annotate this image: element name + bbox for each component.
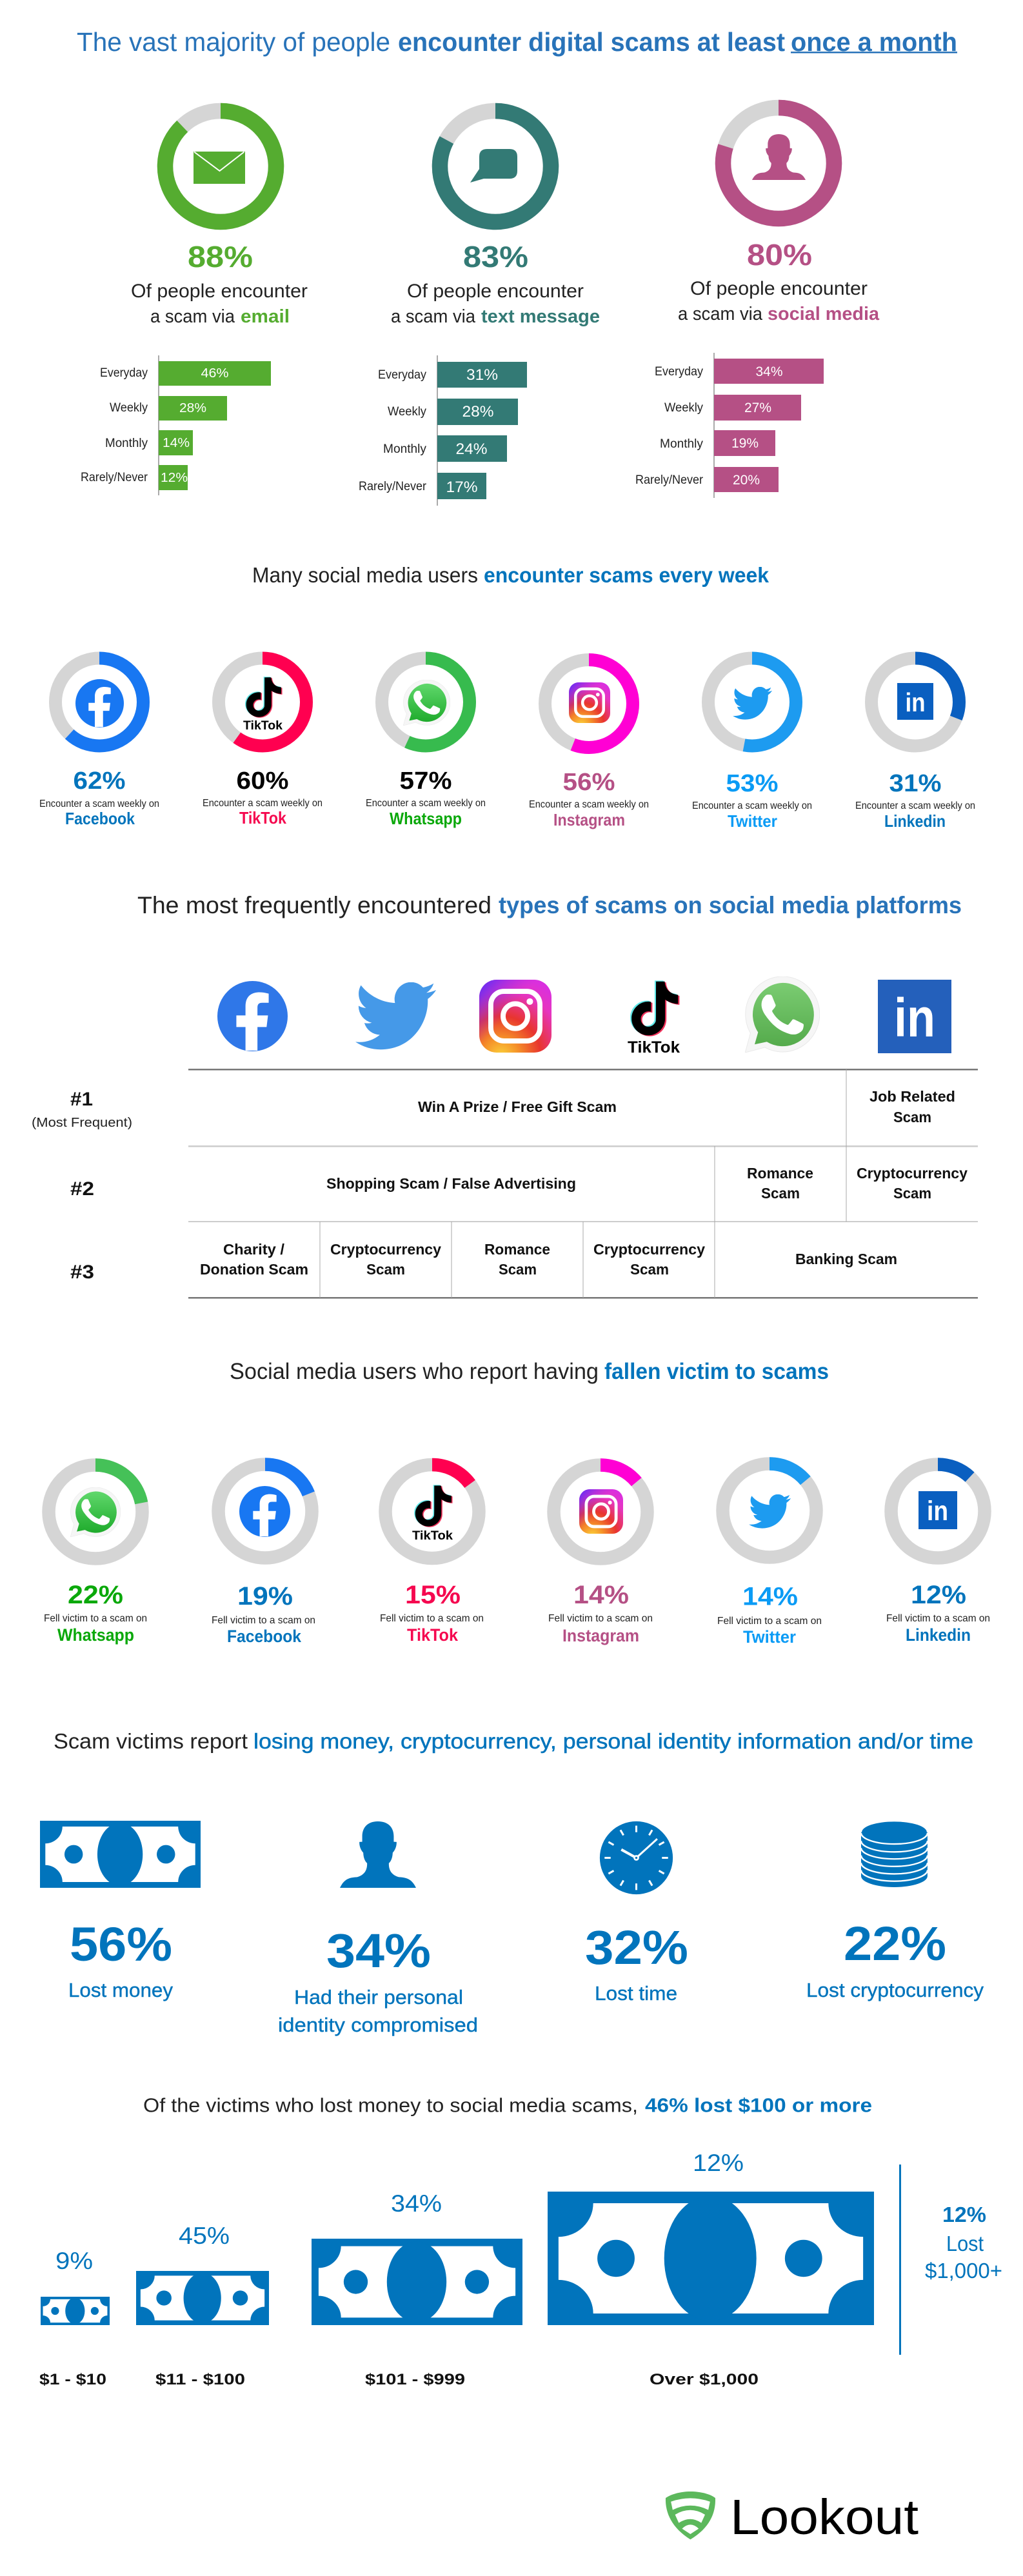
stat: Facebook 62%: [39, 768, 159, 828]
rank labels: #1: [70, 1089, 93, 1110]
stat: Instagram 56%: Instagram: [553, 810, 625, 829]
stat: Instagram 14%: Instagram: [562, 1626, 639, 1645]
row 2 cells: Romance: [747, 1165, 813, 1182]
bar: $101 - $999: $101 - $999: [365, 2371, 465, 2388]
panel: scam types table: [32, 976, 978, 1299]
row 3 cells: [200, 1241, 897, 1278]
stat: TikTok 15%: TikTok: [407, 1625, 459, 1645]
stat: Linkedin 12%: 12%: [911, 1581, 966, 1609]
stat: 83% text message: [391, 240, 600, 327]
stat: 22% lost cryptocurrency: 22%: [844, 1917, 946, 1970]
heading: money lost: [143, 2094, 872, 2117]
stat: Linkedin 12%: [886, 1581, 990, 1645]
stat: TikTok 60%: 60%: [236, 768, 289, 795]
bar: $11 - $100: $11 - $100: [155, 2371, 245, 2388]
bar chart: text frequency: [359, 355, 527, 506]
icon: person: [752, 134, 806, 180]
stat: TikTok 15%: 15%: [405, 1581, 461, 1609]
stat: 88% email: 88%: [188, 240, 253, 273]
stat: 88% email: Of people encounter: [131, 281, 308, 302]
donut chart: Instagram 14%: [553, 1465, 648, 1558]
panel: lost cryptocurrency: [806, 1821, 984, 2001]
stat: 34% identity: Had their personal: [294, 1986, 463, 2008]
panel: weekly Instagram: [529, 660, 649, 829]
donut chart: Facebook 19%: [218, 1464, 312, 1558]
stat: Whatsapp 22%: [44, 1581, 147, 1645]
title: encounter digital scams at least: [398, 27, 785, 57]
bar: $1 - $10: 9%: [55, 2248, 93, 2274]
bar chart: text frequency: Monthly: [383, 442, 427, 456]
bar chart: text frequency: 17%: [446, 479, 477, 496]
row 2 cells: Scam: [761, 1185, 800, 1202]
bar chart: text frequency: 28%: [462, 403, 494, 421]
stat: 80% social media: a scam via: [678, 304, 763, 324]
bar chart: text frequency: 31%: [466, 366, 498, 384]
panel: victims TikTok: [380, 1465, 484, 1645]
panel: victims Instagram: [548, 1465, 653, 1645]
bar chart: social frequency: Weekly: [664, 401, 703, 415]
bar chart: text frequency: Rarely/Never: [359, 480, 427, 493]
panel: weekly Twitter: [692, 658, 812, 831]
heading: weekly scams: [252, 563, 770, 587]
bar chart: social frequency: [635, 353, 824, 498]
icon: TikTok: [412, 1485, 453, 1543]
panel: victims Linkedin: [886, 1464, 990, 1645]
icon: envelope: [194, 152, 245, 184]
icon: Linkedin: [897, 683, 933, 720]
donut chart: social 80%: [723, 108, 834, 219]
icon: Instagram: [579, 1489, 623, 1534]
row 3 cells: Cryptocurrency: [593, 1241, 705, 1258]
icon: coin stack: [861, 1821, 928, 1887]
bar chart: email frequency: 46%: [201, 366, 229, 381]
bar chart: social frequency: 27%: [744, 401, 771, 415]
bar: over $1,000: 12%: [693, 2150, 744, 2176]
panel: weekly Linkedin: [855, 658, 975, 831]
bar: $1 - $10: [39, 2248, 110, 2388]
rank labels: (Most Frequent): [32, 1116, 132, 1130]
stat: TikTok 60%: TikTok: [239, 808, 286, 827]
bar chart: social frequency: 19%: [731, 436, 759, 451]
stat: 34% identity: 34%: [326, 1924, 431, 1977]
stat: Linkedin 31%: [855, 770, 975, 831]
icon: TikTok: TikTok: [412, 1529, 453, 1543]
stat: 83% text message: 83%: [463, 240, 528, 273]
stat: Facebook 19%: [212, 1582, 315, 1646]
stat: 56% lost money: Lost money: [68, 1979, 173, 2001]
stat: Whatsapp 57%: Encounter a scam weekly on: [366, 798, 486, 809]
bar: $1 - $10: $1 - $10: [39, 2371, 106, 2388]
bar chart: email frequency: [81, 355, 271, 495]
stat: Whatsapp 22%: Fell victim to a scam on: [44, 1613, 147, 1624]
icon: Instagram: [569, 682, 610, 723]
stat: Twitter 53%: Encounter a scam weekly on: [692, 800, 812, 811]
callout: 12% lost $1,000+: 12%: [942, 2203, 986, 2226]
stat: Linkedin 31%: Linkedin: [884, 811, 946, 831]
stat: 22% lost cryptocurrency: [806, 1917, 984, 2001]
icon: Twitter: [733, 687, 772, 720]
table grid: [188, 1069, 978, 1299]
donut chart: TikTok 15%: [386, 1465, 479, 1558]
heading: fallen victim: [230, 1359, 829, 1384]
icon: Twitter: [749, 1494, 791, 1529]
stat: 32% lost time: Lost time: [595, 1982, 677, 2005]
rank labels: #3: [70, 1262, 94, 1283]
donut chart: Twitter 53%: [708, 658, 796, 746]
panel: weekly Whatsapp: [366, 658, 486, 828]
row 1 cells: Win A Prize / Free Gift Scam: [418, 1098, 617, 1115]
row 3 cells: Cryptocurrency: [330, 1241, 441, 1258]
bar chart: email frequency: Rarely/Never: [81, 471, 148, 484]
panel: victims Facebook: [212, 1464, 315, 1646]
rank labels: [32, 1089, 132, 1283]
stat: Whatsapp 22%: 22%: [68, 1581, 123, 1609]
donut chart: TikTok 60%: [219, 658, 306, 746]
stat: 22% lost cryptocurrency: Lost cryptocurrency: [806, 1979, 984, 2001]
heading: fallen victim: Social media users who report having: [230, 1359, 599, 1384]
heading: money lost: 46% lost $100 or more: [645, 2094, 872, 2117]
donut chart: Instagram 56%: [545, 660, 633, 748]
stat: Whatsapp 57%: [366, 768, 486, 828]
donut chart: Linkedin 31%: [871, 658, 959, 746]
stat: Instagram 14%: [548, 1581, 653, 1645]
bar chart: social frequency: Monthly: [660, 437, 704, 451]
row 3 cells: Scam: [499, 1261, 537, 1278]
stat: 80% social media: [678, 238, 880, 324]
bar chart: social frequency: 20%: [733, 473, 760, 488]
logo: Lookout: [666, 2490, 919, 2545]
icon row: platforms: [217, 976, 951, 1056]
stat: 80% social media: 80%: [747, 238, 812, 272]
icon: Facebook: [75, 679, 124, 728]
rank labels: #2: [70, 1178, 94, 1200]
stat: Whatsapp 57%: 57%: [400, 768, 452, 795]
stat: Linkedin 31%: 31%: [889, 770, 942, 797]
stat: Whatsapp 57%: Whatsapp: [390, 809, 462, 828]
donut chart: Whatsapp 22%: [49, 1465, 142, 1558]
stat: Facebook 62%: 62%: [74, 768, 125, 795]
title: once a month: [791, 27, 957, 57]
stat: Twitter 14%: 14%: [742, 1583, 798, 1611]
heading: types of scams: types of scams on social media platforms: [499, 892, 962, 918]
panel: lost time: [585, 1821, 688, 2005]
stat: 88% email: a scam via: [150, 306, 235, 327]
icon row: platforms: in: [894, 987, 935, 1048]
stat: 34% identity: [278, 1924, 478, 2036]
callout: 12% lost $1,000+: $1,000+: [925, 2259, 1002, 2283]
stat: Instagram 14%: 14%: [573, 1581, 629, 1609]
icon row: platforms: TikTok: [628, 1038, 680, 1056]
donut chart: email 88%: [165, 111, 276, 222]
bar chart: email frequency: 28%: [179, 401, 206, 415]
panel: text message scams: [359, 111, 600, 506]
row 2 cells: [326, 1165, 968, 1202]
stat: 56% lost money: 56%: [70, 1917, 172, 1971]
row 3 cells: Charity /: [223, 1241, 285, 1258]
stat: 32% lost time: [585, 1921, 688, 2005]
heading: money lost: Of the victims who lost money to social media scams,: [143, 2094, 638, 2117]
bar: $11 - $100: [136, 2223, 269, 2388]
title: [77, 27, 957, 57]
panel: weekly TikTok: [203, 658, 323, 827]
stat: Linkedin 31%: Encounter a scam weekly on: [855, 800, 975, 811]
row 2 cells: Scam: [893, 1185, 931, 1202]
bar: over $1,000: Over $1,000: [650, 2371, 759, 2388]
wordmark: Lookout: [730, 2490, 919, 2545]
heading: weekly scams: encounter scams every week: [484, 563, 770, 587]
heading: what victims lose: losing money, cryptocurrency, personal identity information and/or time: [253, 1729, 973, 1753]
icon: shield: [666, 2492, 715, 2539]
heading: types of scams: The most frequently encountered: [137, 892, 492, 918]
stat: Whatsapp 22%: Whatsapp: [57, 1625, 134, 1645]
row 3 cells: Scam: [630, 1261, 669, 1278]
stat: 88% email: email: [241, 306, 290, 327]
panel: lost money: [40, 1821, 201, 2001]
panel: victims Twitter: [717, 1464, 822, 1647]
bar chart: social frequency: Everyday: [655, 365, 703, 379]
heading: what victims lose: Scam victims report: [54, 1729, 248, 1753]
donut chart: Facebook 62%: [55, 658, 143, 746]
stat: 34% identity: identity compromised: [278, 2014, 478, 2036]
stat: Twitter 53%: 53%: [726, 770, 778, 797]
stat: 80% social media: social media: [768, 304, 880, 324]
bar chart: text frequency: Everyday: [378, 368, 426, 382]
panel: victims Whatsapp: [44, 1465, 147, 1645]
bar: $101 - $999: [312, 2190, 522, 2388]
bar chart: email frequency: Weekly: [110, 401, 148, 415]
stat: 83% text message: text message: [481, 306, 600, 327]
stat: Instagram 56%: [529, 769, 649, 829]
heading: fallen victim: fallen victim to scams: [604, 1359, 829, 1384]
stat: Facebook 19%: 19%: [237, 1582, 293, 1610]
row 1 cells: [418, 1088, 955, 1125]
row 3 cells: Romance: [484, 1241, 550, 1258]
row 2 cells: Shopping Scam / False Advertising: [326, 1175, 576, 1192]
stat: TikTok 15%: [380, 1581, 484, 1645]
icon: person: [340, 1821, 416, 1888]
icon: TikTok: [243, 677, 283, 733]
icon: Linkedin: [919, 1491, 957, 1529]
panel: social media scams: [635, 108, 880, 498]
bar chart: text frequency: 24%: [455, 441, 488, 458]
stat: 80% social media: Of people encounter: [690, 278, 868, 299]
donut chart: Twitter 14%: [722, 1464, 817, 1557]
bar: over $1,000: [548, 2150, 874, 2388]
heading: types of scams: [137, 892, 962, 918]
bar chart: social frequency: 34%: [756, 364, 783, 379]
row 3 cells: Banking Scam: [795, 1251, 897, 1267]
stat: 83% text message: a scam via: [391, 306, 476, 327]
icon: Linkedin: in: [927, 1496, 948, 1527]
donut chart: Linkedin 12%: [891, 1464, 984, 1558]
stat: TikTok 15%: Fell victim to a scam on: [380, 1613, 484, 1624]
row 2 cells: Cryptocurrency: [857, 1165, 968, 1182]
bar chart: text frequency: Weekly: [388, 405, 426, 419]
icon: TikTok: TikTok: [243, 719, 283, 733]
stat: Instagram 56%: Encounter a scam weekly on: [529, 799, 649, 810]
row 1 cells: Job Related: [869, 1088, 955, 1105]
panel: email scams: [81, 111, 308, 495]
stat: TikTok 60%: Encounter a scam weekly on: [203, 798, 323, 809]
stat: Linkedin 12%: Linkedin: [906, 1625, 971, 1645]
stat: 56% lost money: [68, 1917, 173, 2001]
row 3 cells: Donation Scam: [200, 1261, 308, 1278]
stat: TikTok 60%: [203, 768, 323, 827]
bar: $101 - $999: 34%: [391, 2190, 442, 2217]
stat: Facebook 19%: Fell victim to a scam on: [212, 1615, 315, 1626]
panel: weekly Facebook: [39, 658, 159, 828]
stat: Twitter 14%: Twitter: [743, 1627, 796, 1647]
bar chart: email frequency: Everyday: [100, 366, 148, 380]
bar chart: email frequency: 12%: [161, 471, 188, 485]
stat: Instagram 56%: 56%: [562, 769, 615, 796]
stat: Facebook 62%: Encounter a scam weekly on: [39, 798, 159, 809]
title: The vast majority of people: [77, 27, 390, 57]
donut chart: text 83%: [440, 111, 551, 222]
stat: Twitter 14%: Fell victim to a scam on: [717, 1616, 822, 1627]
heading: weekly scams: Many social media users: [252, 563, 478, 587]
stat: Twitter 14%: [717, 1583, 822, 1647]
callout: 12% lost $1,000+: [899, 2165, 1002, 2355]
bar: $11 - $100: 45%: [179, 2223, 230, 2249]
stat: Twitter 53%: Twitter: [728, 811, 777, 831]
stat: Facebook 19%: Facebook: [227, 1627, 302, 1646]
icon: Whatsapp: [403, 680, 450, 726]
row 1 cells: Scam: [893, 1109, 931, 1125]
icon: chat bubble: [470, 149, 517, 183]
stat: Twitter 53%: [692, 770, 812, 831]
bar chart: email frequency: Monthly: [105, 437, 148, 450]
icon: banknote: [40, 1821, 201, 1888]
stat: 83% text message: Of people encounter: [407, 281, 584, 302]
row 3 cells: Scam: [366, 1261, 405, 1278]
stat: Facebook 62%: Facebook: [65, 809, 135, 828]
stat: Instagram 14%: Fell victim to a scam on: [548, 1613, 653, 1624]
stat: 88% email: [131, 240, 308, 327]
bar chart: email frequency: 14%: [163, 436, 190, 450]
chart: banknote size by amount lost: [39, 2150, 874, 2388]
icon: Whatsapp: [70, 1487, 121, 1537]
icon: Linkedin: in: [906, 688, 925, 717]
bar chart: social frequency: Rarely/Never: [635, 473, 704, 487]
stat: Linkedin 12%: Fell victim to a scam on: [886, 1613, 990, 1624]
icon: Facebook: [239, 1486, 290, 1537]
callout: 12% lost $1,000+: Lost: [946, 2232, 984, 2255]
donut chart: Whatsapp 57%: [382, 658, 470, 746]
panel: identity compromised: [278, 1821, 478, 2036]
icon: clock: [600, 1821, 673, 1894]
stat: 32% lost time: 32%: [585, 1921, 688, 1974]
